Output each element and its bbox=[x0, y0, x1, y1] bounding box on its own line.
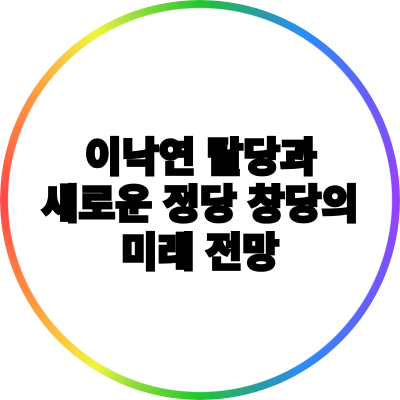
title line 1: 이낙연 탈당과 bbox=[85, 136, 317, 180]
title line 2: 새로운 정당 창당의 bbox=[42, 183, 358, 227]
title line 3: 미래 전망 bbox=[121, 231, 279, 275]
